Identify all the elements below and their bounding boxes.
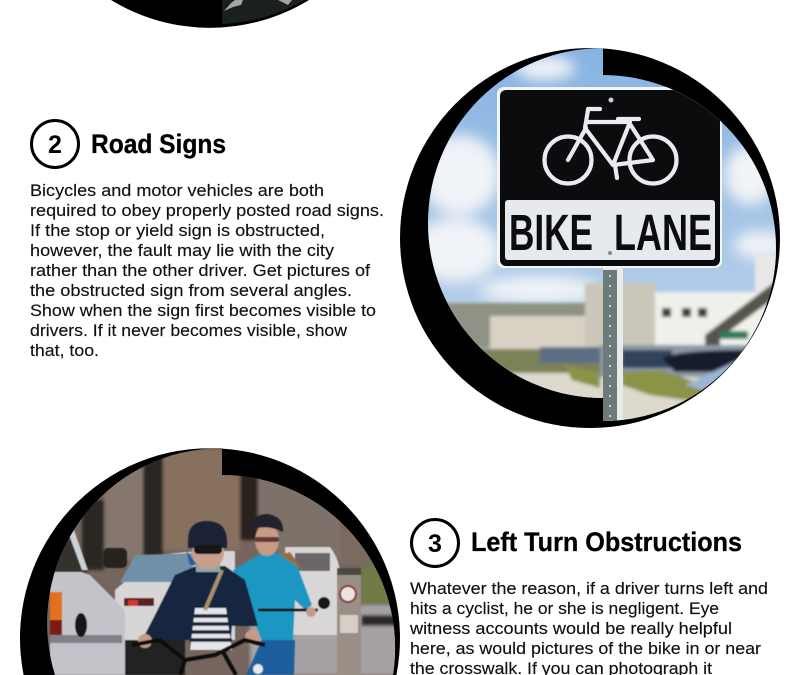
section 2 heading: Road Signs (91, 129, 226, 159)
bicycle pictogram (544, 109, 676, 184)
section 2 body text: rather than the other driver. Get pictures of (30, 261, 370, 280)
section 3 heading: Left Turn Obstructions (471, 527, 742, 557)
sign post (337, 570, 361, 675)
photo circle: section 1 remnant (111, 0, 309, 28)
section 2 body text: Show when the sign first becomes visible to (30, 301, 376, 320)
cyclist in teal jacket (233, 553, 312, 640)
section 3 body text (409, 579, 768, 675)
sign pole (603, 268, 623, 423)
section 2 number badge (32, 120, 78, 168)
section 3 number badge: 3 (428, 530, 442, 558)
section 2 body text: Bicycles and motor vehicles are both (30, 181, 324, 200)
section 2 body text: drivers. If it never becomes visible, show (30, 321, 348, 340)
section 3 number badge (412, 520, 458, 566)
white pickup truck (50, 570, 125, 675)
sign lettering (511, 214, 711, 250)
section 3 body text: Whatever the reason, if a driver turns left and (410, 579, 768, 598)
section 3 body text: here, as would pictures of the bike in or near (410, 639, 761, 658)
background cars (285, 547, 340, 635)
road sign: bike lane (497, 87, 722, 268)
section 2 body text: however, the fault may lie with the city (30, 241, 335, 260)
photo circle: bike lane sign (400, 45, 786, 428)
section 2 body text: required to obey properly posted road signs. (30, 201, 384, 220)
cyclist in navy jacket (142, 566, 258, 650)
section 2 number badge: 2 (48, 131, 62, 159)
section 2 body text: If the stop or yield sign is obstructed, (30, 221, 325, 240)
section 3 body text: witness accounts would be really helpful (409, 619, 732, 638)
photo circle: two cyclists (20, 448, 400, 675)
section 2 body text: the obstructed sign from several angles. (30, 281, 352, 300)
section 2 body text: that, too. (30, 341, 99, 360)
sign lettering: BIKE (509, 204, 593, 261)
sign lettering: LANE (614, 204, 712, 261)
section 3 body text: hits a cyclist, he or she is negligent. Eye (410, 599, 719, 618)
section 2 body text (30, 181, 384, 360)
